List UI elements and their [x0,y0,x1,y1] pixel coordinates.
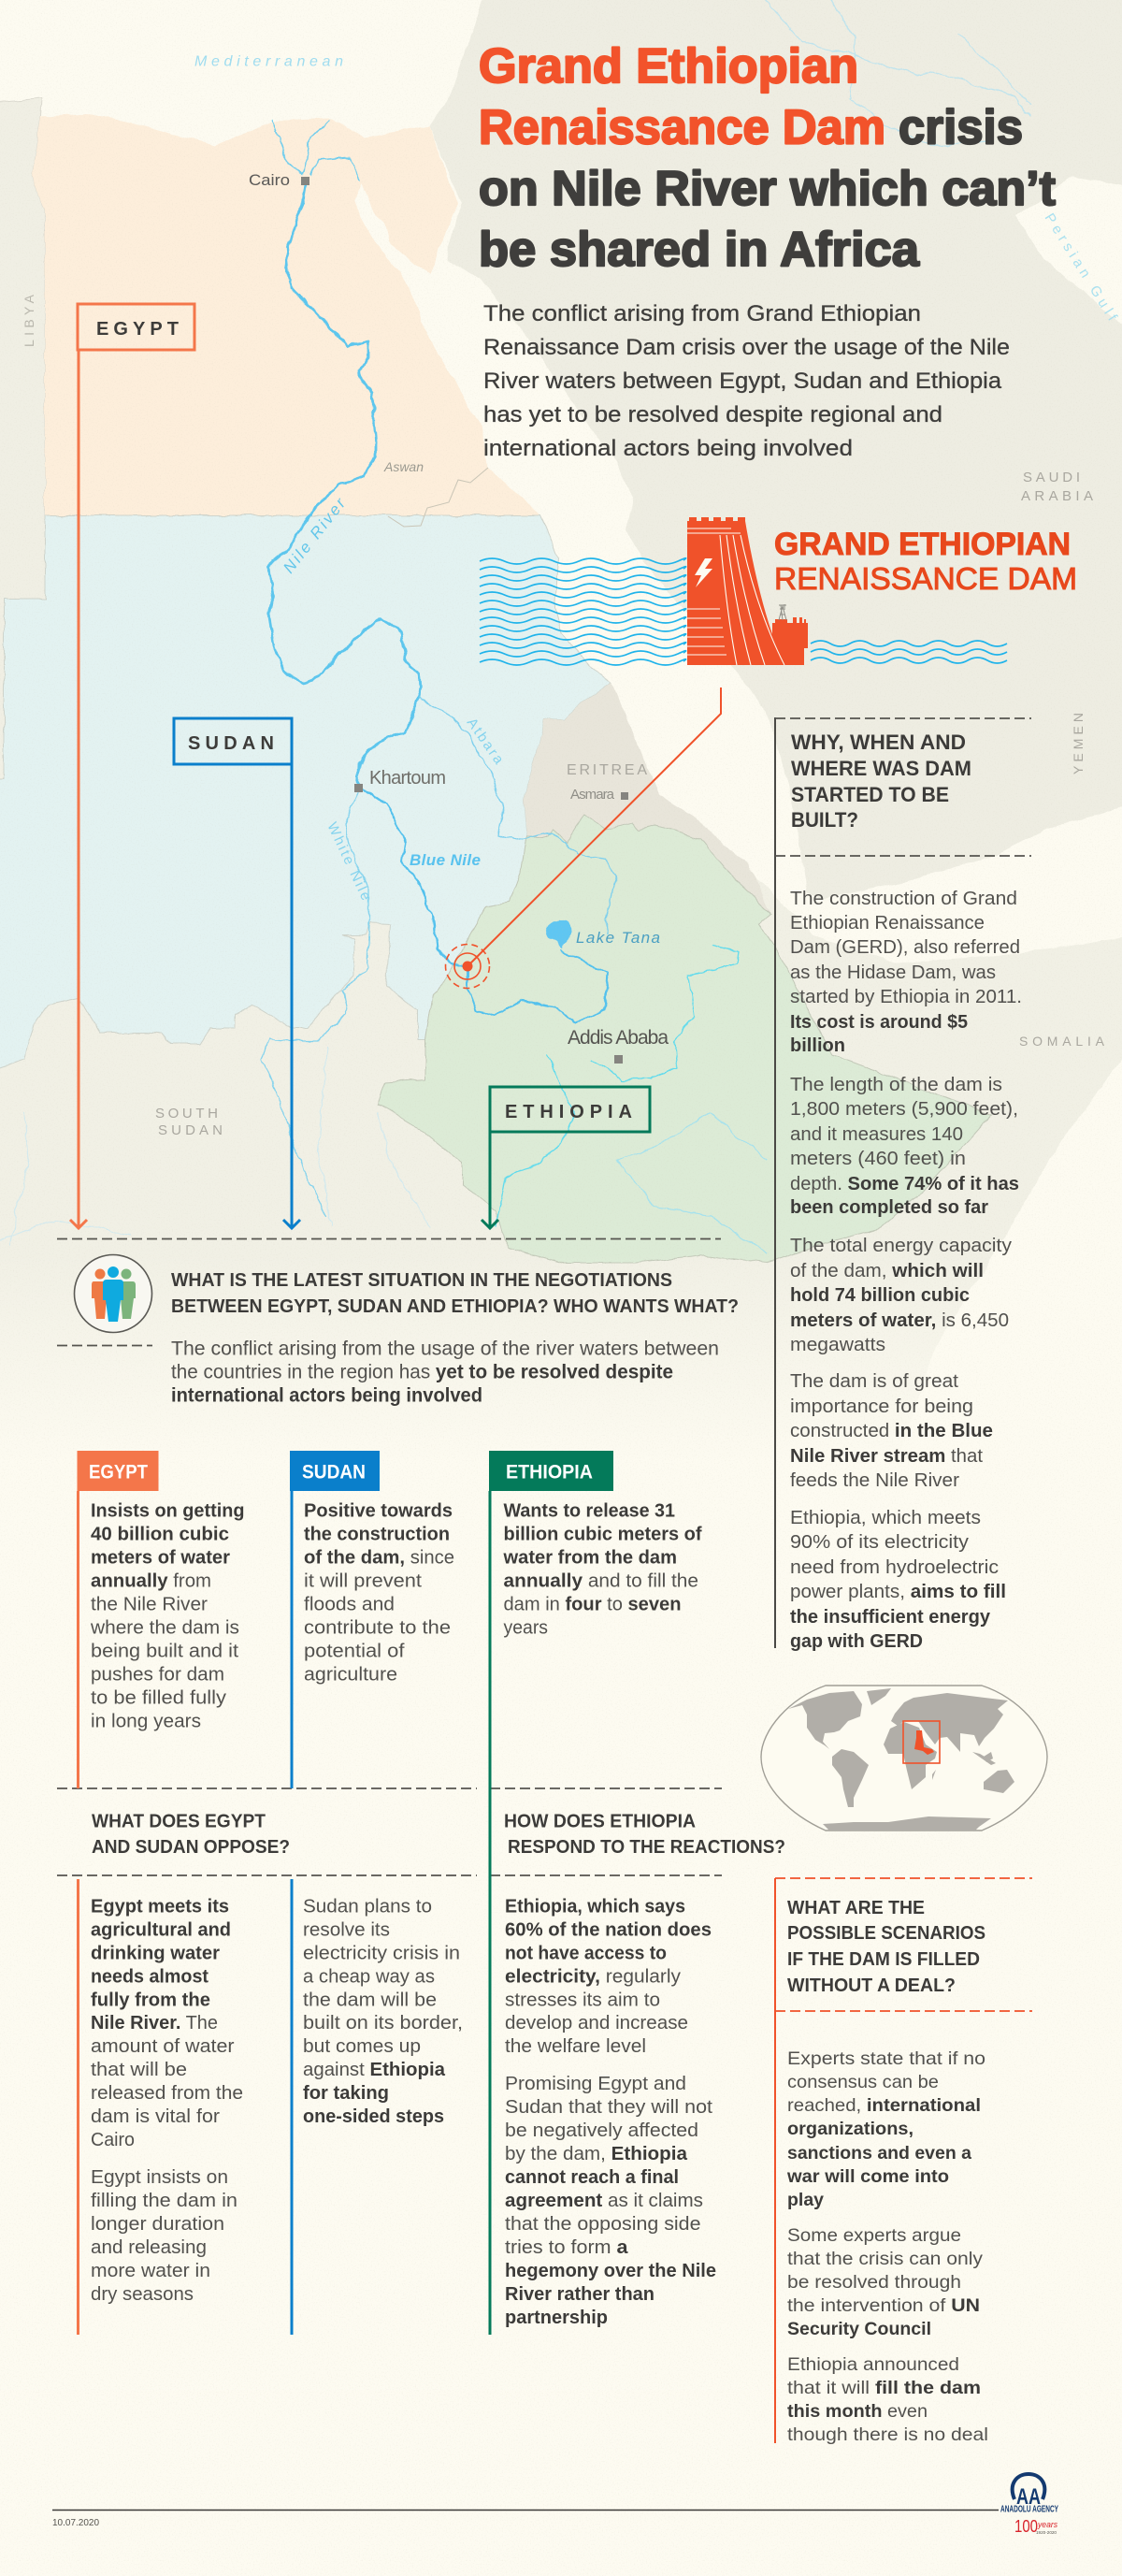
Mesopotamia rivers [766,0,1030,146]
label: Libya: LIBYA [22,294,36,347]
text: Ethiopia responds: Promising Egypt and [505,2074,686,2094]
label: Aswan: Aswan [383,459,424,474]
panel: possible scenarios [775,1878,1032,2445]
tag: Egypt [77,1451,159,1491]
text: Ethiopia responds [505,1897,716,2328]
text: Ethiopia responds: Ethiopia, which says [505,1897,685,1918]
heading: Ethiopia response: HOW DOES ETHIOPIA [504,1811,696,1831]
rivers [0,0,1030,1253]
text: Egypt wants: meters of water [91,1547,230,1568]
text: scenarios: Some experts argue [787,2225,961,2246]
text: Ethiopia responds: hegemony over the Nile [505,2261,716,2281]
text: scenarios: though there is no deal [787,2424,988,2445]
label: Egypt with arrow: EGYPT [96,319,179,340]
land regions [0,0,1122,1459]
region: Ethiopia [379,814,991,1263]
text: Sudan opposes: for taking [303,2083,389,2104]
text: Egypt opposes: Cairo [91,2130,135,2150]
text: dam facts: importance for being [790,1397,973,1417]
text: Egypt wants [90,1500,244,1732]
text: scenarios: Experts state that if no [787,2048,985,2069]
text: dam facts: hold 74 billion cubic [790,1285,970,1306]
footer date: 10.07.2020 [52,2518,99,2528]
marker: Asmara [621,792,628,800]
text: scenarios: consensus can be [787,2072,939,2092]
text: Ethiopia responds: develop and increase [505,2013,688,2033]
panel: why, when and where [775,717,1031,1652]
label: Blue Nile: Blue Nile [410,851,481,869]
heading: Ethiopia response: RESPOND TO THE REACTIONS? [508,1837,785,1858]
label: Addis Ababa: Addis Ababa [568,1027,669,1049]
heading: why, when and where: WHERE WAS DAM [791,757,971,780]
text: Ethiopia responds: tries to form a [505,2237,628,2258]
label: Egypt with arrow [70,304,194,1228]
text: dam facts: Dam (GERD), also referred [790,937,1020,958]
intro paragraph [483,301,1010,461]
text: Sudan opposes: against Ethiopia [303,2060,446,2080]
label: Persian Gulf: Persian Gulf [1042,210,1120,325]
text: dam facts: billion [790,1035,845,1056]
text: Egypt wants: where the dam is [90,1618,239,1639]
region: Egypt [32,113,540,515]
label: Yemen: YEMEN [1071,713,1086,774]
dam label: RENAISSANCE DAM [774,562,1077,597]
negotiations paragraph: the countries in the region has yet to be resolved despite [171,1362,673,1382]
text: dam facts: and it measures 140 [790,1124,963,1145]
text: Egypt opposes: released from the [91,2083,243,2104]
label: Atbara: Atbara [464,716,507,768]
label: Lake Tana: Lake Tana [576,929,660,947]
text: scenarios: war will come into [786,2166,949,2187]
text: scenarios: reached, international [787,2095,981,2116]
intro paragraph: River waters between Egypt, Sudan and Ethiopia [483,369,1002,394]
heading: negotiations: BETWEEN EGYPT, SUDAN AND ETHIOPIA? WHO WANTS WHAT? [171,1296,739,1317]
text: Sudan wants: contribute to the [304,1618,451,1639]
negotiations paragraph: international actors being involved [171,1384,482,1407]
region: Eritrea [524,683,771,914]
label: Sudan with arrow [174,718,300,1228]
text: scenarios: the intervention of UN [787,2295,980,2316]
text: Sudan wants: Positive towards [304,1500,453,1521]
label: South Sudan: SUDAN [158,1122,223,1138]
text: Egypt opposes: filling the dam in [91,2191,237,2211]
text: Ethiopia responds: not have access to [505,1944,667,1964]
logo: Anadolu Agency: 1920-2020 [1036,2530,1057,2535]
text: Ethiopia responds: Sudan that they will not [505,2097,712,2118]
text: scenarios [786,2048,988,2445]
text: dam facts: Its cost is around $5 [790,1012,968,1033]
text: scenarios: organizations, [787,2119,913,2139]
text: Ethiopia responds: partnership [505,2308,608,2328]
region: Sudan [0,515,611,1071]
text: Egypt opposes: Egypt meets its [91,1897,229,1918]
label: Saudi Arabia: ARABIA [1021,488,1093,504]
text: dam facts: meters of water, is 6,450 [790,1310,1009,1331]
Atbara river [421,697,617,933]
heading: scenarios: WITHOUT A DEAL? [787,1975,956,1996]
text: Sudan opposes: resolve its [303,1919,390,1940]
Halayeb border [388,468,488,527]
text: Egypt opposes: drinking water [91,1944,220,1964]
text: Ethiopia wants: years [503,1618,548,1639]
text: Sudan wants: potential of [304,1641,405,1661]
intro paragraph: The conflict arising from Grand Ethiopian [483,301,921,326]
heading: scenarios: POSSIBLE SCENARIOS [787,1922,985,1944]
label: White Nile: White Nile [324,820,374,903]
text: dam facts: Nile River stream that [790,1446,983,1467]
text: Egypt opposes: and releasing [91,2237,207,2258]
text: Egypt wants: 40 billion cubic [91,1525,229,1545]
text: dam facts: 1,800 meters (5,900 feet), [790,1099,1018,1120]
footer rule [52,2509,999,2511]
text: Ethiopia wants: dam in four to seven [503,1594,681,1614]
text: dam facts: Ethiopian Renaissance [790,913,985,933]
text: dam facts: power plants, aims to fill [790,1582,1006,1602]
tag: Sudan: SUDAN [302,1461,366,1483]
text: Egypt wants: to be filled fully [91,1687,226,1708]
text: Sudan wants: agriculture [304,1665,397,1686]
text: Egypt opposes: dry seasons [91,2284,194,2305]
text: scenarios: that the crisis can only [787,2249,983,2269]
negotiations paragraph [171,1338,719,1407]
heading: why, when and where: WHY, WHEN AND [791,731,966,754]
dam label [774,527,1077,597]
text: Sudan opposes [303,1897,463,2127]
text: Ethiopia responds: the welfare level [505,2036,646,2057]
label: Sudan with arrow: SUDAN [188,733,274,754]
intro paragraph: Renaissance Dam crisis over the usage of the Nile [483,335,1010,360]
text: Ethiopia wants: water from the dam [502,1547,677,1568]
heading: scenarios: WHAT ARE THE [787,1897,925,1918]
heading: Egypt and Sudan oppose [92,1811,290,1858]
text: Ethiopia responds: by the dam, Ethiopia [505,2144,688,2164]
text: Sudan opposes: electricity crisis in [303,1944,460,1964]
text: Egypt opposes: agricultural and [91,1919,231,1940]
label: Eritrea: ERITREA [567,762,647,778]
White Nile river [262,792,369,1216]
dashed rules [57,1238,722,1875]
text: Egypt opposes: Nile River. The [91,2013,218,2033]
text: Sudan wants [304,1500,454,1686]
waves: downstream side [811,641,1007,663]
heading: Egypt and Sudan oppose: AND SUDAN OPPOSE? [92,1837,290,1858]
text: dam facts: megawatts [790,1335,885,1355]
text: Egypt opposes: that will be [91,2060,187,2080]
icon: dam [687,517,808,665]
title: be shared in Africa [479,223,920,277]
label: Khartoum: Khartoum [369,768,446,789]
text: Egypt opposes: more water in [91,2261,210,2281]
logo: Anadolu Agency: AA [1016,2484,1041,2510]
text: Sudan opposes: built on its border, [303,2013,463,2033]
column rules [79,1491,490,2335]
icon: three people [75,1255,151,1332]
tag: Egypt: EGYPT [89,1461,148,1483]
label: South Sudan [155,1106,223,1138]
text: Egypt opposes: needs almost [91,1966,209,1987]
heading: scenarios: IF THE DAM IS FILLED [787,1948,980,1970]
Ethiopian tributaries [0,945,767,1253]
text: dam facts: feeds the Nile River [790,1470,959,1491]
text: Sudan opposes: one-sided steps [303,2106,444,2127]
marker: dam site [445,945,490,988]
heading: negotiations: WHAT IS THE LATEST SITUATION IN THE NEGOTIATIONS [171,1270,672,1291]
text: dam facts: as the Hidase Dam, was [790,962,996,983]
logo: Anadolu Agency: 100 [1014,2517,1038,2536]
heading: why, when and where: STARTED TO BE [791,783,949,806]
text: dam facts: been completed so far [790,1197,988,1218]
heading: why, when and where [791,731,971,832]
text: scenarios: this month even [787,2401,928,2422]
title: Renaissance Dam [479,101,885,155]
marker: Addis Ababa [614,1055,623,1064]
label: Cairo: Cairo [249,171,290,189]
text: Ethiopia wants: Wants to release 31 [503,1500,675,1521]
fade of land to paper [0,1253,1122,1464]
negotiations paragraph: The conflict arising from the usage of the river waters between [171,1338,719,1360]
title: Grand Ethiopian [479,39,858,94]
text: Egypt opposes: fully from the [91,1990,210,2011]
Lake Tana [545,921,570,949]
text: Sudan wants: the construction [304,1525,450,1545]
text: Ethiopia responds: cannot reach a final [505,2167,679,2188]
dam label: GRAND ETHIOPIAN [774,527,1071,562]
text: Sudan opposes: Sudan plans to [303,1897,432,1918]
intro paragraph: has yet to be resolved despite regional and [483,402,942,427]
text: Sudan opposes: a cheap way as [303,1966,435,1987]
tag: Ethiopia [489,1451,613,1491]
heading: scenarios [787,1897,985,1996]
intro paragraph: international actors being involved [483,436,853,461]
text: scenarios: play [787,2190,824,2210]
text: Ethiopia wants: annually and to fill the [503,1571,698,1592]
text: dam facts: The length of the dam is [790,1075,1002,1095]
text: dam facts: constructed in the Blue [790,1421,993,1441]
label: Ethiopia with arrow: ETHIOPIA [505,1102,632,1122]
text: dam facts: The dam is of great [790,1371,958,1392]
label: Mediterranean: Mediterranean [194,54,343,69]
label: Saudi Arabia: SAUDI [1023,470,1080,485]
text: Ethiopia responds: stresses its aim to [505,1990,660,2011]
text: scenarios: sanctions and even a [787,2143,971,2164]
leader line: dam location [468,687,721,966]
text: Ethiopia responds: agreement as it claims [505,2191,703,2211]
locator world map [761,1686,1047,1831]
tag: Sudan [290,1451,380,1491]
text: dam facts: gap with GERD [790,1631,923,1652]
text: scenarios: Ethiopia announced [787,2354,959,2375]
heading: why, when and where: BUILT? [791,808,858,832]
text: Egypt opposes [91,1897,243,2305]
text: Egypt opposes: dam is vital for [91,2106,220,2127]
text: Egypt opposes: amount of water [91,2036,235,2057]
text: scenarios: that it will fill the dam [787,2378,981,2398]
heading: Egypt and Sudan oppose: WHAT DOES EGYPT [92,1811,266,1831]
text: Egypt opposes: Egypt insists on [91,2167,228,2188]
text: Ethiopia responds: electricity, regularly [505,1966,681,1987]
text: Ethiopia responds: 60% of the nation does [505,1919,712,1940]
label: Nile River: Nile River [280,494,350,576]
text: Sudan wants: of the dam, since [304,1547,454,1568]
text: Egypt wants: annually from [91,1571,211,1592]
text: dam facts: The total energy capacity [790,1236,1012,1256]
text: Egypt wants: being built and it [91,1641,238,1661]
text: Egypt wants: the Nile River [91,1594,208,1614]
label: Somalia: SOMALIA [1019,1034,1105,1049]
text: Ethiopia wants [502,1500,702,1639]
text: Egypt wants: pushes for dam [91,1665,224,1686]
logo: Anadolu Agency: years [1037,2520,1057,2529]
title: crisis [899,101,1023,155]
text: Ethiopia responds: be negatively affected [505,2120,698,2141]
text: dam facts: of the dam, which will [790,1261,984,1281]
text: Ethiopia wants: billion cubic meters of [503,1525,702,1545]
marker: Cairo [301,177,309,185]
Blue Nile river [358,786,608,1022]
text: dam facts [790,889,1022,1652]
text: Sudan wants: floods and [304,1594,395,1614]
logo: Anadolu Agency: ANADOLU AGENCY [1000,2505,1058,2514]
land: Libya [0,98,45,779]
text: dam facts: meters (460 feet) in [790,1149,966,1169]
text: Egypt wants: in long years [91,1712,201,1732]
text: dam facts: Ethiopia, which meets [790,1508,981,1528]
text: Sudan wants: it will prevent [304,1571,422,1592]
text: Sudan opposes: the dam will be [303,1990,437,2011]
text: scenarios: Security Council [787,2319,931,2339]
tag: Ethiopia: ETHIOPIA [506,1461,593,1483]
text: Ethiopia responds: River rather than [505,2284,654,2305]
text: Ethiopia responds: that the opposing side [505,2214,701,2235]
heading: negotiations [171,1270,739,1317]
text: dam facts: need from hydroelectric [790,1557,999,1578]
main Nile river [268,183,420,788]
text: dam facts: The construction of Grand [790,889,1017,909]
marker: Khartoum [354,784,363,792]
logo: Anadolu Agency [1000,2474,1058,2536]
label: Asmara: Asmara [570,787,615,803]
text: dam facts: started by Ethiopia in 2011. [790,987,1022,1007]
text: Egypt wants: Insists on getting [91,1500,245,1521]
heading: Ethiopia response [504,1811,785,1858]
land: Arabian peninsula [430,0,1122,898]
Nile delta branches [272,119,361,181]
text: Sudan opposes: but comes up [303,2036,421,2057]
waves: reservoir side [480,558,686,665]
text: dam facts: depth. Some 74% of it has [790,1174,1019,1194]
text: scenarios: be resolved through [787,2272,961,2293]
title [479,39,1056,277]
text: dam facts: 90% of its electricity [790,1532,969,1553]
text: dam facts: the insufficient energy [790,1607,991,1628]
land: Somalia and southern Africa [0,748,1122,1459]
title: on Nile River which can’t [479,162,1056,216]
label: Saudi Arabia [1021,470,1093,504]
label: South Sudan: SOUTH [155,1106,218,1122]
text: Egypt opposes: longer duration [91,2214,224,2235]
label: Ethiopia with arrow [482,1087,650,1228]
